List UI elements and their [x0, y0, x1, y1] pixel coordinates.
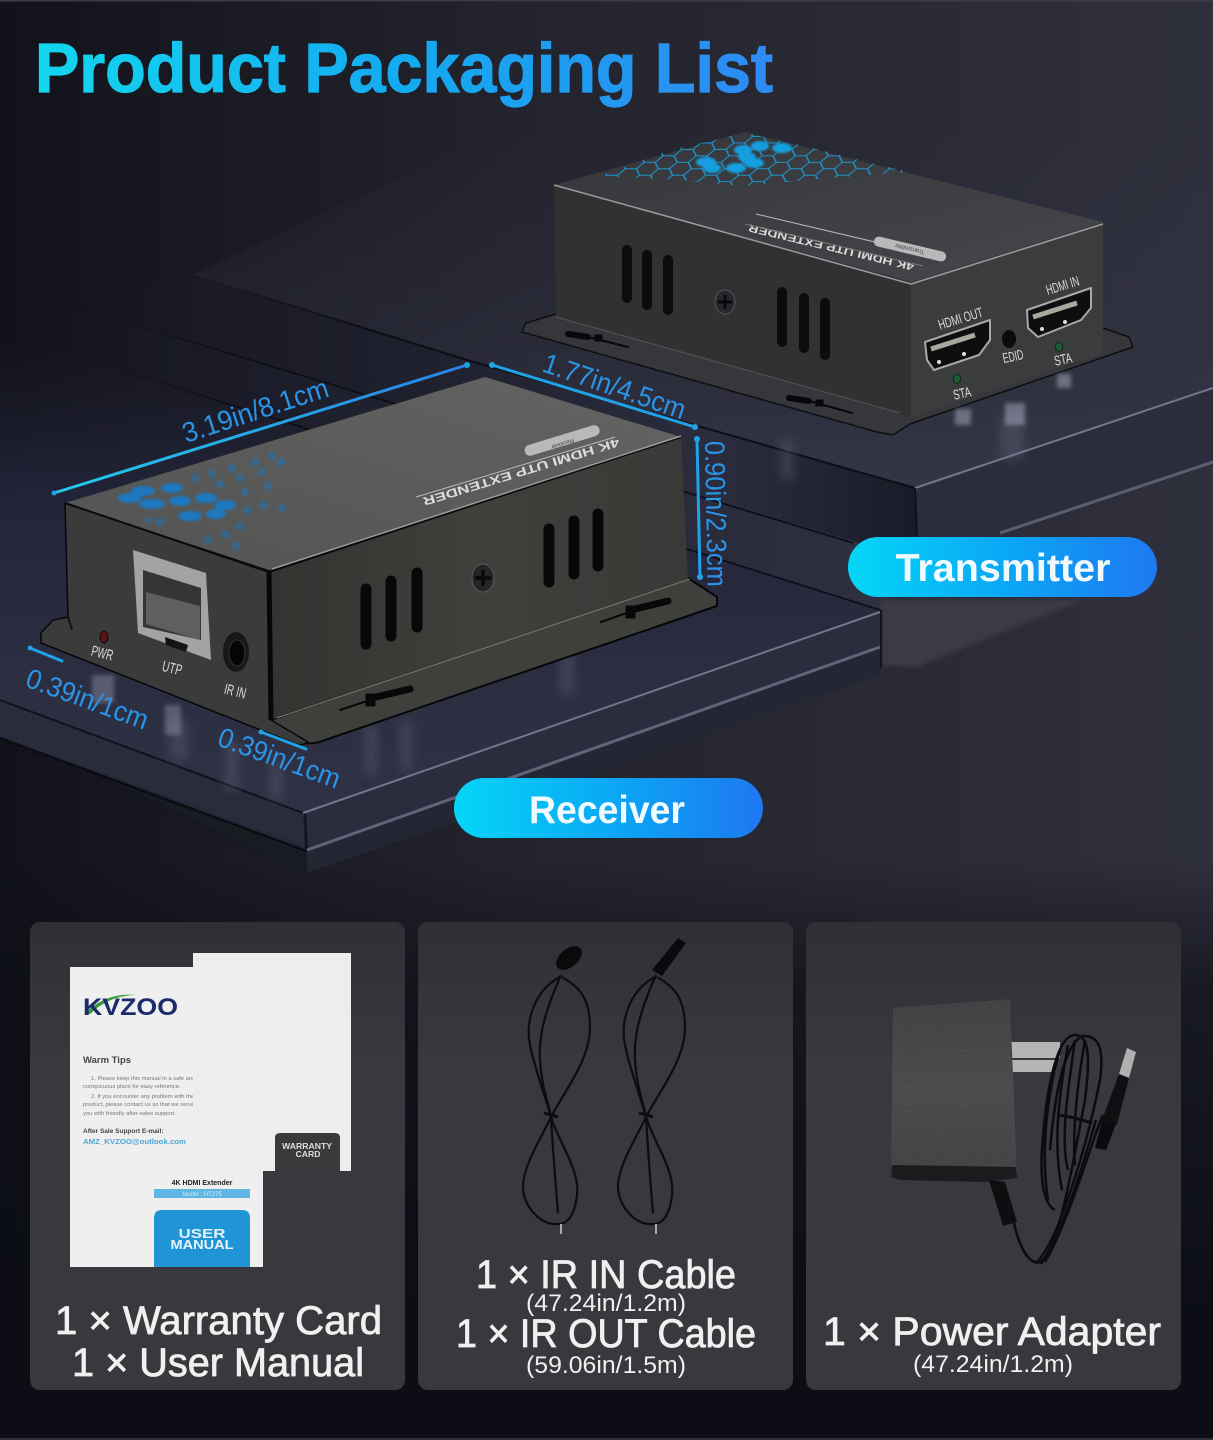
side face [269, 437, 688, 720]
receiver pill: Receiver [529, 789, 685, 832]
user manual: Warm Tips [83, 1055, 131, 1066]
user manual: MANUAL [170, 1237, 234, 1252]
power LED [100, 631, 108, 643]
DC plug [1095, 1048, 1136, 1150]
panel: IR cables [418, 922, 793, 1390]
caption: (47.24in/1.2m) [913, 1351, 1073, 1378]
panel: documents [30, 922, 405, 1390]
port labels: PWR [89, 643, 115, 665]
EDID button [1002, 330, 1016, 348]
power adapter [891, 999, 1136, 1264]
top face [554, 132, 1103, 282]
receiver shelf left face [0, 700, 305, 850]
user manual [70, 967, 263, 1267]
HDMI OUT port [925, 320, 990, 370]
transmitter pill [848, 537, 1157, 597]
caption: (59.06in/1.5m) [526, 1352, 686, 1379]
caption: 1 × Warranty Card [55, 1299, 382, 1343]
port labels [936, 273, 1081, 403]
warranty card: CARD [296, 1150, 321, 1159]
port labels: EDID [1001, 346, 1025, 366]
flange [271, 578, 717, 743]
user manual: After Sale Support E-mail: [83, 1128, 164, 1135]
adapter body [891, 999, 1017, 1178]
caption: 1 × Power Adapter [823, 1310, 1161, 1354]
lower background fade [0, 860, 1213, 1440]
dimension lines [28, 362, 703, 749]
vents [627, 250, 825, 355]
side face [554, 185, 911, 417]
IR OUT blaster cable [618, 938, 686, 1234]
user manual: Model : HT275 [182, 1192, 222, 1198]
reflections [955, 374, 1071, 425]
honeycomb print [118, 452, 286, 550]
user manual: you with friendly after-sales support. [83, 1111, 176, 1117]
title: Product Packaging List [35, 29, 773, 107]
stepped shelves [0, 130, 1213, 873]
transmitter device [522, 132, 1133, 435]
caption [823, 1310, 1161, 1378]
logo: KVZOO [83, 994, 178, 1021]
screw [715, 290, 735, 314]
top label: 4K HDMI UTP EXTENDER [747, 221, 915, 272]
status LEDs [954, 342, 1062, 384]
dimension labels: 1.77in/4.5cm [539, 347, 690, 425]
top face [65, 377, 681, 570]
soft wedge under the upper shelf [881, 600, 1083, 667]
port labels: HDMI IN [1044, 273, 1081, 298]
dimension labels [22, 347, 733, 794]
honeycomb print [600, 133, 908, 186]
top label: 4K HDMI UTP EXTENDER [421, 435, 621, 509]
reflections [92, 675, 181, 735]
IR IN jack [223, 632, 249, 672]
caption: 1 × User Manual [72, 1341, 364, 1385]
dimension labels: 3.19in/8.1cm [178, 372, 332, 449]
mounting slots [340, 601, 668, 710]
user manual: product, please contact us so that we serve [83, 1102, 194, 1108]
dimension labels: 0.90in/2.3cm [699, 441, 733, 587]
dimension labels: 0.39in/1cm [22, 663, 153, 735]
user manual: AMZ_KVZOO@outlook.com [83, 1137, 186, 1146]
RJ45 port [133, 550, 211, 660]
port labels: UTP [160, 658, 184, 679]
port labels: STA [1052, 349, 1074, 369]
port labels: HDMI OUT [936, 304, 985, 333]
port labels: IR IN [222, 681, 248, 703]
transmitter shelf top surface [193, 130, 1213, 488]
caption [456, 1253, 756, 1379]
warranty card: WARRANTY [282, 1142, 333, 1151]
vents [366, 514, 598, 644]
mounting slots [568, 334, 852, 413]
top label: Receiver [550, 437, 574, 449]
top label [416, 424, 621, 509]
flange [522, 314, 1133, 435]
top label [745, 214, 947, 272]
user manual: USER [178, 1226, 226, 1241]
caption: 1 × IR OUT Cable [456, 1312, 756, 1356]
HDMI IN port [1027, 288, 1091, 337]
caption [55, 1299, 382, 1385]
user manual: 2. If you encounter any problem with the [91, 1094, 194, 1100]
end face [911, 222, 1103, 417]
receiver shelf right face [303, 612, 880, 850]
lower lip [63, 303, 916, 610]
bottom edge line [0, 1438, 1213, 1440]
transmitter shelf left face [63, 275, 916, 561]
cable coil [1014, 1035, 1103, 1264]
transmitter pill: Transmitter [896, 547, 1110, 590]
port labels: STA [951, 383, 973, 403]
port labels [89, 643, 248, 703]
shelf reflections [170, 415, 1024, 800]
strain relief [989, 1180, 1017, 1226]
receiver shelf top surface [0, 332, 880, 813]
user manual: 1. Please keep this manual in a safe and [91, 1076, 195, 1082]
caption: (47.24in/1.2m) [526, 1290, 686, 1317]
transmitter shelf right face [915, 388, 1213, 561]
warranty card [193, 953, 351, 1171]
caption: 1 × IR IN Cable [476, 1253, 736, 1297]
receiver pill [454, 778, 763, 838]
screw [472, 564, 494, 592]
top label: Transmitter [894, 242, 925, 254]
top edge line [0, 0, 1213, 2]
user manual: 4K HDMI Extender [172, 1180, 233, 1187]
front face with base [41, 503, 308, 745]
dimension labels: 0.39in/1cm [214, 722, 345, 794]
IR IN receiver cable [523, 941, 590, 1234]
panel: power adapter [806, 922, 1181, 1390]
user manual: conspicuous place for easy reference. [83, 1084, 181, 1090]
prongs [1010, 1042, 1060, 1072]
receiver device [41, 377, 717, 745]
